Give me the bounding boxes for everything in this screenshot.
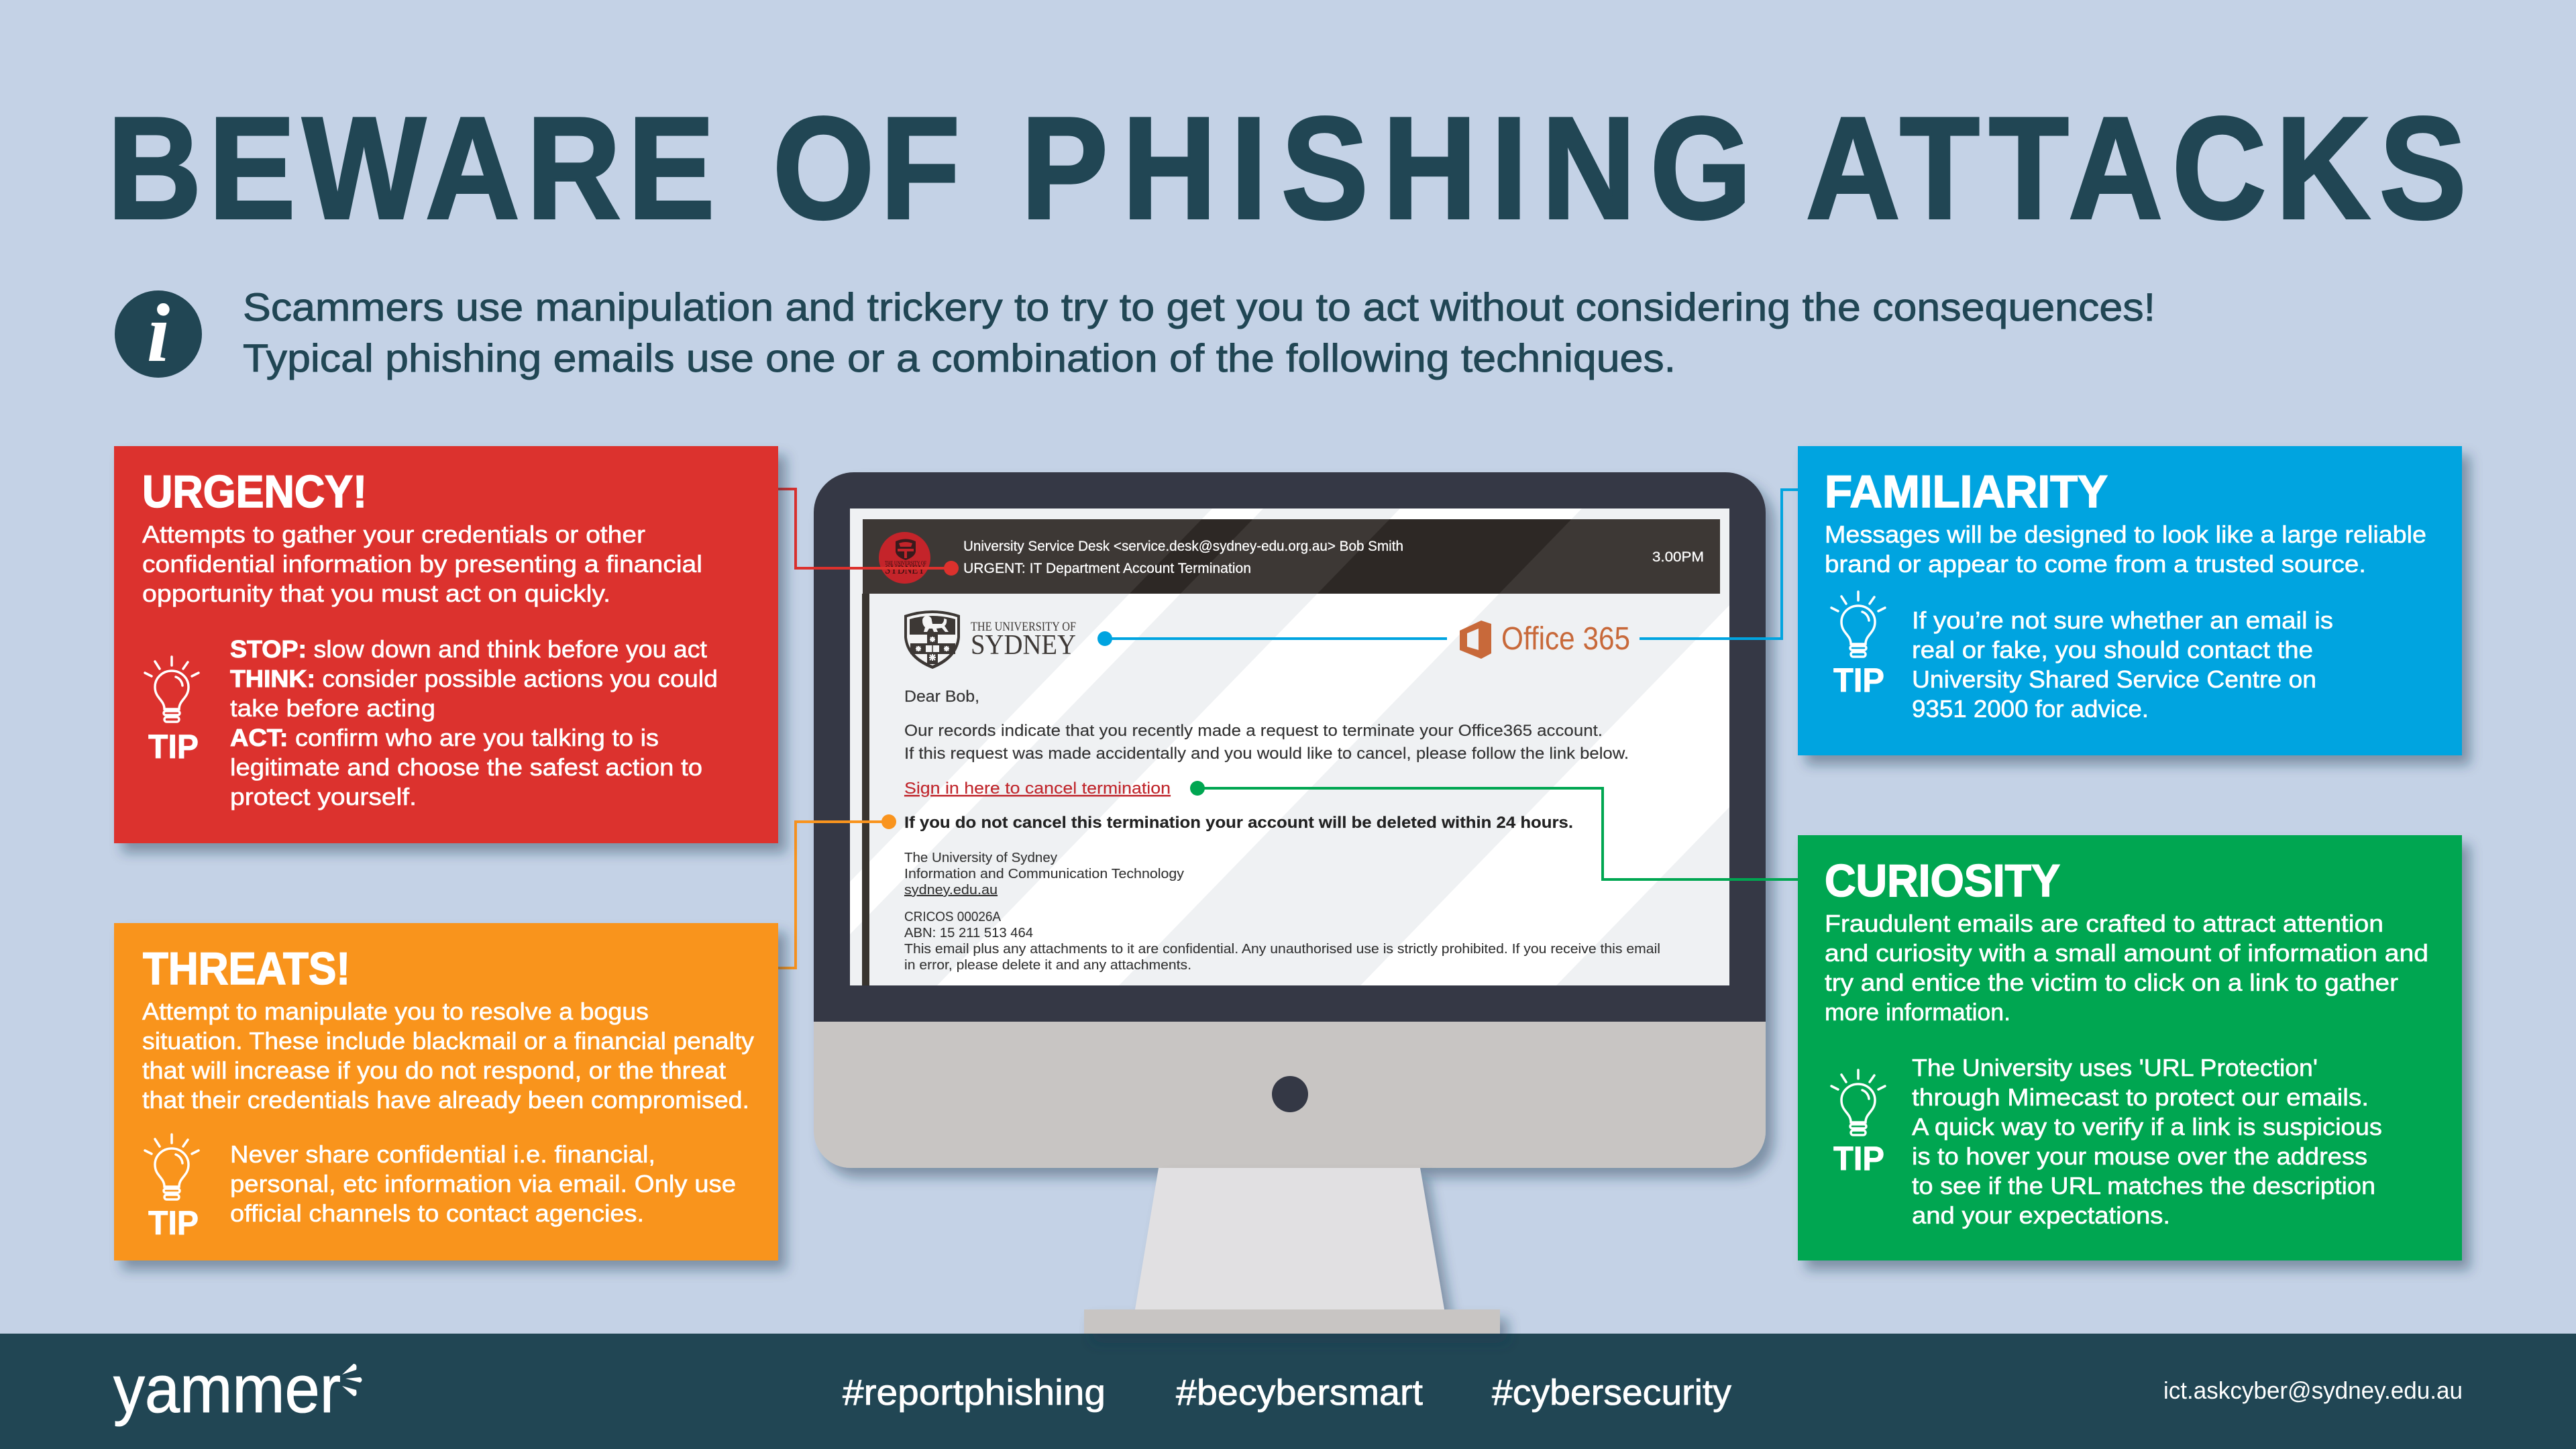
hashtags: #cybersecurity (1492, 1373, 1731, 1413)
text: familiarity tip (1912, 606, 2333, 722)
intro text (243, 286, 2155, 380)
footer bar (0, 1334, 2576, 1449)
heading: threats: THREATS! (143, 943, 350, 994)
text: urgency description (142, 521, 702, 607)
text: curiosity tip: The University uses 'URL Protection' (1912, 1054, 2318, 1081)
connector: threats (778, 814, 896, 968)
text: threats tip: official channels to contact agencies. (230, 1199, 644, 1227)
email body text: The University of Sydney (904, 851, 1057, 865)
office 365 logo: Office 365 (1501, 621, 1630, 657)
monitor body (814, 472, 1766, 1168)
panel: familiarity (1798, 446, 2462, 755)
text: urgency tip: THINK: consider possible actions you could (230, 665, 718, 692)
intro text: Typical phishing emails use one or a combination of the following techniques. (243, 337, 1676, 380)
text: urgency tip (230, 635, 718, 810)
text: curiosity tip: and your expectations. (1912, 1201, 2170, 1229)
title: PHISHING (1021, 87, 1752, 249)
email body text: in error, please delete it and any attachments. (904, 958, 1191, 973)
text: familiarity tip: If you’re not sure whether an email is (1912, 606, 2333, 634)
title: BEWARE (107, 87, 714, 249)
text: urgency tip: ACT: confirm who are you talking to is (230, 724, 659, 751)
hashtags: #becybersmart (1176, 1373, 1423, 1413)
email body text: If this request was made accidentally and you would like to cancel, please follow the link below. (904, 745, 1629, 763)
email body text: Our records indicate that you recently made a request to terminate your Office365 account. (904, 722, 1603, 740)
email header bar: University Service Desk <service.desk@sydney-edu.org.au> Bob Smith (963, 539, 1403, 554)
text: curiosity tip: A quick way to verify if a link is suspicious (1912, 1113, 2382, 1140)
text: urgency tip: legitimate and choose the safest action to (230, 753, 702, 781)
heading: urgency: URGENCY! (142, 466, 367, 517)
icon: tip bulb (1831, 592, 1885, 657)
email screen (850, 508, 1729, 985)
text: curiosity description: try and entice the victim to click on a link to gather (1825, 969, 2398, 996)
panel: curiosity (1798, 835, 2462, 1260)
text: curiosity tip: is to hover your mouse over the address (1912, 1142, 2367, 1170)
icon: tip bulb (145, 1134, 199, 1199)
panel: urgency (114, 446, 778, 843)
hashtags: #reportphishing (843, 1373, 1106, 1413)
text: familiarity tip: University Shared Service Centre on (1912, 665, 2316, 693)
office 365 logo (1460, 621, 1630, 659)
text: threats tip: Never share confidential i.e. financial, (230, 1140, 655, 1168)
heading: curiosity: CURIOSITY (1825, 855, 2060, 906)
text: threats description: that their credentials have already been compromised. (142, 1086, 749, 1114)
text: urgency tip: STOP: slow down and think before you act (230, 635, 707, 663)
text: familiarity tip: 9351 2000 for advice. (1912, 695, 2149, 722)
text: familiarity tip: real or fake, you should contact the (1912, 636, 2313, 663)
connector: urgency (778, 489, 959, 576)
monitor stand (1084, 1168, 1500, 1334)
contact email: ict.askcyber@sydney.edu.au (2163, 1377, 2463, 1404)
university of sydney logo: THE UNIVERSITY OF (971, 620, 1076, 634)
panel: threats (114, 923, 778, 1260)
label: tip: TIP (1833, 661, 1884, 699)
text: threats description: situation. These include blackmail or a financial penalty (142, 1027, 754, 1055)
label: tip: TIP (148, 1204, 199, 1242)
text: curiosity tip (1912, 1054, 2382, 1229)
label: tip: TIP (1833, 1140, 1884, 1177)
heading: familiarity: FAMILIARITY (1825, 466, 2108, 517)
text: curiosity description: and curiosity with a small amount of information and (1825, 939, 2428, 967)
email header bar: 3.00PM (1652, 549, 1704, 565)
monitor (814, 472, 1766, 1334)
title (107, 87, 2467, 249)
text: urgency tip: protect yourself. (230, 783, 417, 810)
icon: information: i (147, 287, 170, 379)
shield (904, 610, 960, 669)
text: urgency tip: take before acting (230, 694, 435, 722)
monitor button (1272, 1076, 1308, 1112)
university of sydney logo (904, 610, 1076, 669)
logo: yammer: yammer (113, 1352, 341, 1427)
email header bar (863, 519, 1720, 594)
intro text: Scammers use manipulation and trickery to try to get you to act without considering the consequences! (243, 286, 2155, 329)
text: familiarity description (1825, 521, 2426, 578)
text: urgency description: confidential information by presenting a financial (142, 550, 702, 578)
text: threats description: that will increase if you do not respond, or the threat (142, 1057, 726, 1084)
connector: familiarity (1097, 490, 1798, 646)
icon: tip bulb (145, 657, 199, 722)
text: curiosity description (1825, 910, 2428, 1026)
text: curiosity description: Fraudulent emails are crafted to attract attention (1825, 910, 2383, 937)
text: urgency description: Attempts to gather your credentials or other (142, 521, 645, 548)
text: threats tip: personal, etc information via email. Only use (230, 1170, 736, 1197)
email body text: Information and Communication Technology (904, 867, 1184, 881)
email left strip (862, 594, 869, 985)
text: threats description (142, 998, 754, 1114)
email body text (904, 688, 1660, 973)
text: familiarity description: Messages will be designed to look like a large reliable (1825, 521, 2426, 548)
email header bar: URGENT: IT Department Account Termination (963, 561, 1251, 576)
icon: tip bulb (1831, 1070, 1885, 1135)
hashtags (843, 1373, 1731, 1413)
university of sydney logo: SYDNEY (971, 630, 1076, 661)
text: curiosity tip: to see if the URL matches the description (1912, 1172, 2375, 1199)
title: OF (773, 87, 960, 249)
email body text: If you do not cancel this termination your account will be deleted within 24 hours. (904, 814, 1573, 832)
text: familiarity description: brand or appear to come from a trusted source. (1825, 550, 2366, 578)
email body text: Dear Bob, (904, 688, 979, 706)
text: threats description: Attempt to manipulate you to resolve a bogus (142, 998, 649, 1025)
connector: curiosity (1190, 781, 1798, 879)
title: ATTACKS (1806, 87, 2467, 249)
icon: information (115, 287, 202, 379)
text: threats tip (230, 1140, 736, 1227)
text: curiosity tip: through Mimecast to protect our emails. (1912, 1083, 2369, 1111)
email body text: Sign in here to cancel termination (904, 780, 1171, 798)
label: tip: TIP (148, 728, 199, 765)
icon: red university seal: SYDNEY (885, 563, 925, 576)
email body text: sydney.edu.au (904, 883, 998, 898)
email body text: ABN: 15 211 513 464 (904, 926, 1033, 941)
icon: red university seal (879, 532, 930, 584)
email body text: CRICOS 00026A (904, 910, 1002, 924)
text: urgency description: opportunity that you must act on quickly. (142, 580, 610, 607)
email body text: This email plus any attachments to it are confidential. Any unauthorised use is strictly prohibited. If you receive this email (904, 942, 1660, 957)
text: curiosity description: more information. (1825, 998, 2010, 1026)
icon: red university seal: THE UNIVERSITY OF (885, 560, 926, 566)
